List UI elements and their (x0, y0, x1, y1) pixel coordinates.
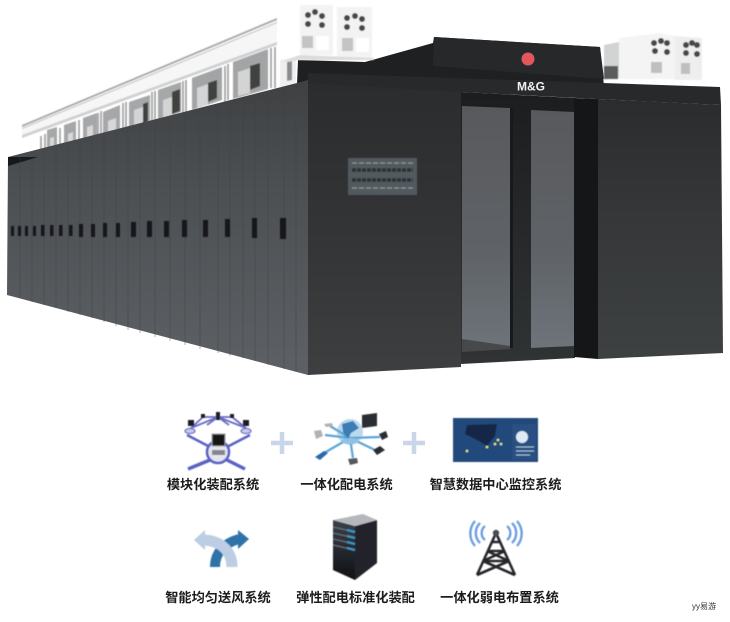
feature: integrated power distribution (300, 413, 393, 492)
icon: globe with devices (314, 413, 388, 465)
logo: M&G (517, 80, 545, 94)
feature: modular assembly system (167, 412, 259, 492)
icon: plus (403, 432, 425, 454)
sliding door (461, 92, 598, 364)
icon: plus (271, 432, 293, 454)
feature: integrated low voltage (440, 521, 559, 605)
feature: elastic power distribution (296, 514, 415, 605)
icon: signal tower (470, 521, 522, 575)
side handles (11, 218, 286, 239)
feature: uniform airflow (165, 530, 271, 605)
feature: smart data center monitoring (430, 418, 561, 492)
label: 模块化装配系统 (167, 476, 259, 492)
front wall (308, 73, 723, 375)
rooftop white units right (604, 33, 702, 80)
rooftop cable rail and modules (22, 18, 296, 157)
back roof section with red button (297, 37, 604, 86)
label: 智慧数据中心监控系统 (430, 476, 561, 492)
label: 弹性配电标准化装配 (296, 589, 415, 605)
watermark: yy易游 (692, 601, 716, 611)
monitoring screen (348, 158, 417, 195)
icon: monitoring dashboard (453, 418, 538, 462)
label: 一体化弱电布置系统 (440, 589, 559, 605)
label: 一体化配电系统 (300, 476, 393, 492)
wall ribs (20, 86, 296, 372)
rooftop white units left (281, 5, 374, 62)
icon: red button (522, 52, 534, 66)
container module illustration (7, 5, 723, 375)
label: 智能均匀送风系统 (165, 589, 271, 605)
left side wall (7, 80, 308, 375)
right front panel (598, 99, 723, 359)
icon: server tower (333, 514, 377, 580)
icon: split arrows (194, 530, 249, 567)
icon: network of computers (185, 412, 251, 469)
